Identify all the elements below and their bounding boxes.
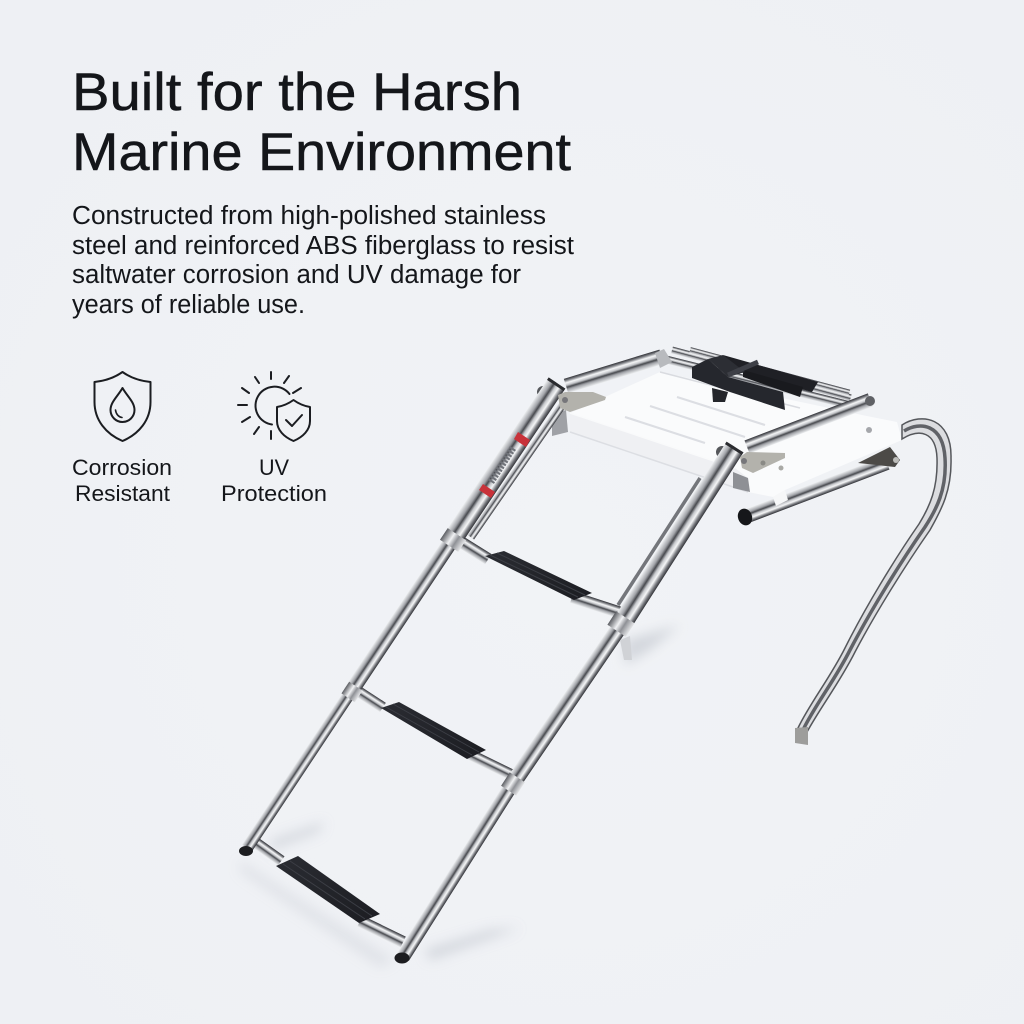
right ladder rail [394, 442, 743, 964]
side frame tube [745, 393, 875, 454]
product: boarding ladder [239, 347, 951, 968]
label: corrosion resistant [72, 455, 172, 506]
feature: UV protection [221, 372, 327, 506]
label: UV protection: UV [259, 455, 289, 480]
curved hand rail [798, 419, 951, 732]
short support tube [736, 447, 900, 527]
hinge plates [558, 392, 785, 473]
label: corrosion resistant: Resistant [75, 481, 170, 506]
description text: years of reliable use. [72, 291, 305, 319]
description text: saltwater corrosion and UV damage for [72, 261, 522, 289]
step 3 [249, 836, 406, 947]
description text [72, 202, 574, 319]
icon: shield with water drop [94, 372, 150, 441]
description text: steel and reinforced ABS fiberglass to resist [72, 232, 574, 260]
floor shadows [240, 625, 680, 968]
hand rail foot plate [795, 727, 808, 745]
title [72, 63, 571, 182]
rear frame tubes [564, 347, 853, 410]
step 1 [453, 534, 621, 618]
feature: corrosion resistant [72, 372, 172, 506]
black bracket [692, 355, 818, 410]
title: Marine Environment [72, 123, 571, 182]
label: UV protection: Protection [221, 481, 327, 506]
icon: sun with shield [238, 372, 310, 441]
title: Built for the Harsh [72, 63, 522, 122]
white platform board [552, 372, 902, 497]
label: UV protection [221, 455, 327, 506]
description text: Constructed from high-polished stainless [72, 202, 546, 230]
left ladder rail [239, 377, 566, 856]
step 2 [353, 685, 514, 780]
label: corrosion resistant: Corrosion [72, 455, 172, 480]
